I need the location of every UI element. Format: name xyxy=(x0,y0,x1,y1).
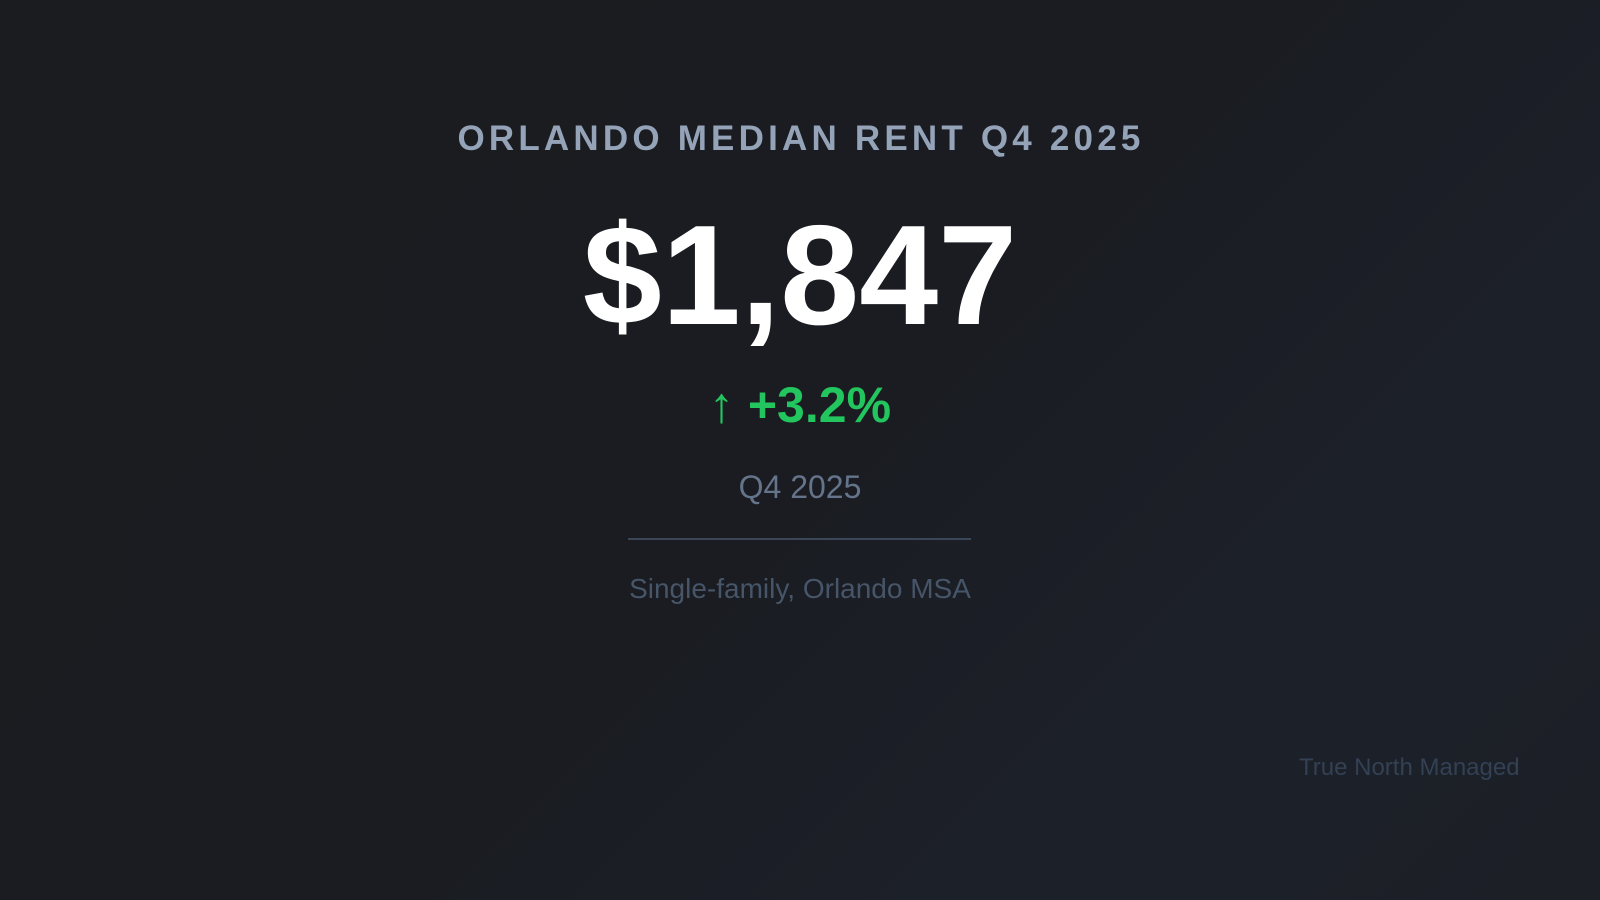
headline value: $1,847 xyxy=(583,196,1017,355)
period label: Q4 2025 xyxy=(739,469,861,505)
footer brand: True North Managed xyxy=(1299,754,1520,781)
change indicator: ↑ +3.2% xyxy=(709,377,891,433)
title: ORLANDO MEDIAN RENT Q4 2025 xyxy=(457,119,1145,158)
divider xyxy=(628,538,971,540)
subtitle: Single-family, Orlando MSA xyxy=(629,573,971,604)
